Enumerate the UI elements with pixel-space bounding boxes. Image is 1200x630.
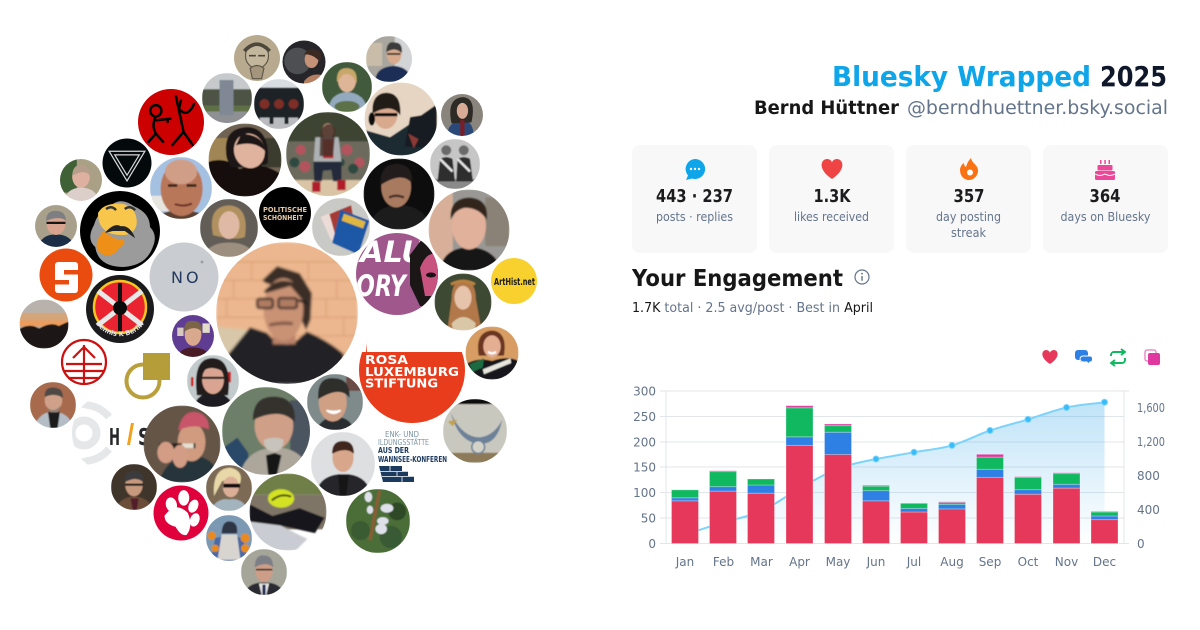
avatar: man in dark jacket on grey bbox=[311, 432, 375, 496]
bar: April bbox=[786, 406, 813, 544]
avatar: man with headphones and dog bbox=[364, 82, 438, 156]
avatar: political beauty logo bbox=[259, 187, 311, 239]
avatar: blond person on green bbox=[322, 62, 372, 112]
avatar: NO ball: NO bbox=[171, 268, 202, 287]
left axis labels: 50 bbox=[641, 512, 656, 526]
avatar: main portrait of Bernd bbox=[216, 242, 358, 384]
right axis labels: 1,200 bbox=[1137, 435, 1165, 449]
legend icon: quotes bbox=[1145, 350, 1160, 365]
legend icon: likes bbox=[1042, 350, 1058, 364]
left axis labels bbox=[633, 384, 656, 551]
avatar: woman blonde bbox=[200, 199, 258, 257]
month labels: May bbox=[826, 555, 850, 569]
avatar: woman with glasses bbox=[187, 355, 239, 407]
title: 2025 bbox=[1100, 60, 1167, 93]
avatar: man in suit bbox=[241, 549, 287, 595]
stat card: likes received bbox=[769, 145, 894, 253]
month labels: Jun bbox=[866, 555, 885, 569]
avatar: purple poster: ORY bbox=[356, 269, 408, 303]
avatar: triangle logo bbox=[102, 138, 152, 188]
avatar: Dennis K Berlin wheel: Dennis K Berlin bbox=[96, 320, 144, 336]
stat card: posts and replies: posts · replies bbox=[656, 210, 733, 224]
right axis labels bbox=[1137, 401, 1165, 551]
avatar: road runner mosaic bbox=[443, 399, 507, 463]
avatar: man in dark bbox=[364, 158, 434, 230]
icon: chat bubble bbox=[686, 159, 705, 180]
stat card: days on Bluesky: 364 bbox=[1090, 186, 1120, 207]
stat card: days on Bluesky bbox=[1043, 145, 1168, 253]
avatar: red lines logo bbox=[62, 340, 106, 384]
icon: cake bbox=[1095, 160, 1115, 180]
avatar: red stick figures bbox=[138, 89, 204, 155]
avatar: sketch portrait bbox=[234, 35, 280, 81]
month labels: Nov bbox=[1055, 555, 1078, 569]
avatar: books on table bbox=[312, 198, 370, 256]
avatar: HIS logo: S bbox=[138, 425, 150, 451]
bar: August bbox=[938, 502, 966, 544]
avatar: red paw logo bbox=[154, 486, 208, 540]
avatar: gold square and ring logo bbox=[126, 353, 170, 398]
plot frame and grid bbox=[660, 391, 1129, 544]
month labels: Jul bbox=[906, 555, 921, 569]
avatar: NO ball bbox=[150, 242, 218, 312]
avatar: purple poster: ALU bbox=[358, 235, 426, 269]
left axis labels: 250 bbox=[633, 410, 656, 424]
avatar: man with navy sweater bbox=[366, 36, 413, 82]
avatar: woman on floral sofa bbox=[286, 112, 370, 197]
avatar: Haus der Wannsee-Konferenz logo: ILDUNGSSTÄTTE bbox=[378, 438, 429, 447]
avatar: Haus der Wannsee-Konferenz logo bbox=[378, 430, 447, 482]
bar: December bbox=[1091, 512, 1118, 544]
avatar: orange S logo bbox=[40, 248, 92, 302]
stat card: posts and replies bbox=[632, 145, 757, 253]
engagement summary: 1.7K total · 2.5 avg/post · Best in April bbox=[632, 300, 873, 316]
icon: flame bbox=[960, 158, 978, 180]
month labels bbox=[675, 555, 1116, 569]
cumulative line bbox=[685, 402, 1104, 535]
avatar: man with dark hair bbox=[111, 464, 157, 510]
avatar: man with camera bbox=[282, 40, 326, 84]
avatar: man with black shirt bbox=[428, 190, 510, 270]
avatar: Haus der Wannsee-Konferenz logo: AUS DER bbox=[378, 446, 409, 455]
month labels: Sep bbox=[979, 555, 1001, 569]
stat card: day posting streak bbox=[906, 145, 1031, 253]
avatar: Rosa Luxemburg Stiftung logo: STIFTUNG bbox=[365, 376, 438, 390]
stat card: likes received: likes received bbox=[794, 210, 869, 224]
avatar: helmet on car bbox=[250, 474, 326, 550]
avatar: woman lying down bbox=[466, 326, 518, 380]
user name: Bernd Hüttner bbox=[754, 97, 900, 119]
avatar: Dennis K Berlin wheel bbox=[86, 275, 154, 343]
bar: November bbox=[1053, 473, 1080, 544]
avatar: man on green background bbox=[60, 159, 102, 201]
avatar: figure with mask among oranges bbox=[206, 515, 252, 561]
stat card: day posting streak: 357 bbox=[954, 186, 984, 207]
legend icon: reposts bbox=[1111, 349, 1125, 366]
avatar: Haus der Wannsee-Konferenz logo: ENK- UND bbox=[385, 430, 419, 439]
month labels: Apr bbox=[789, 555, 810, 569]
month labels: Feb bbox=[713, 555, 734, 569]
icon: info bbox=[855, 270, 869, 284]
avatar: man in purple room bbox=[172, 315, 214, 357]
avatar: HIS logo: H bbox=[109, 425, 120, 451]
avatar: blonde with sunglasses bbox=[206, 465, 252, 511]
left axis labels: 0 bbox=[648, 537, 656, 551]
right axis labels: 800 bbox=[1137, 469, 1160, 483]
right axis labels: 1,600 bbox=[1137, 401, 1165, 415]
bar: October bbox=[1014, 477, 1042, 544]
avatar: man in beige jacket smiling bbox=[222, 387, 312, 475]
bar: June bbox=[862, 485, 890, 544]
legend icon: replies bbox=[1075, 350, 1092, 364]
avatar: black police line bbox=[254, 79, 304, 129]
month labels: Oct bbox=[1018, 555, 1039, 569]
cumulative area bbox=[685, 402, 1104, 544]
bar: May bbox=[824, 424, 852, 544]
user handle: @berndhuettner.bsky.social bbox=[907, 98, 1168, 119]
icon: heart bbox=[822, 159, 842, 179]
avatar: ArtHist.net logo bbox=[491, 258, 537, 304]
month labels: Dec bbox=[1093, 555, 1116, 569]
avatar: sunset bbox=[20, 300, 68, 348]
stat card: days on Bluesky: days on Bluesky bbox=[1060, 210, 1150, 224]
avatar: Rosa Luxemburg Stiftung logo bbox=[359, 343, 470, 425]
avatar: woman in black bbox=[208, 124, 282, 196]
avatar: purple poster bbox=[356, 233, 440, 315]
avatar: ArtHist.net logo: ArtHist.net bbox=[494, 277, 535, 288]
left axis labels: 150 bbox=[633, 460, 656, 474]
avatar: Botticelli painting bbox=[434, 274, 492, 330]
bar: July bbox=[900, 503, 928, 544]
right axis labels: 0 bbox=[1137, 537, 1145, 551]
avatar: man smiling by the river bbox=[307, 374, 363, 430]
avatar: woman with dark hair bbox=[441, 94, 483, 136]
avatar: man with red cap and flute bbox=[144, 406, 220, 482]
month labels: Jan bbox=[675, 555, 694, 569]
avatar: HIS logo bbox=[72, 404, 150, 462]
left axis labels: 300 bbox=[633, 384, 656, 398]
title: Bluesky Wrapped bbox=[832, 60, 1091, 93]
bar: February bbox=[710, 471, 736, 544]
avatar: Rosa Luxemburg Stiftung logo: ROSA bbox=[365, 353, 409, 367]
left axis labels: 200 bbox=[633, 436, 656, 450]
right axis labels: 400 bbox=[1137, 503, 1160, 517]
avatar: political beauty logo: SCHÖNHEIT bbox=[263, 213, 303, 222]
avatar cluster bbox=[20, 35, 537, 595]
stat card: day posting streak: day posting bbox=[936, 210, 1001, 224]
avatar: black and white historic photo bbox=[430, 139, 480, 189]
stat card: likes received: 1.3K bbox=[814, 186, 851, 207]
legend bbox=[1042, 349, 1160, 366]
avatar: flowers bbox=[346, 489, 410, 553]
bar: January bbox=[672, 490, 698, 544]
avatar: Haus der Wannsee-Konferenz logo: WANNSEE-KONFEREN bbox=[378, 455, 447, 464]
cumulative points bbox=[873, 399, 1108, 462]
avatar: bald man bbox=[150, 157, 212, 219]
bar: September bbox=[976, 454, 1004, 544]
heading: Your Engagement: Your Engagement bbox=[631, 266, 843, 292]
avatar: Berlin wall bbox=[202, 73, 252, 124]
avatar: thinking emoji wizard bbox=[80, 191, 160, 271]
stat card: day posting streak: streak bbox=[951, 226, 986, 240]
chart: monthly engagement bbox=[633, 384, 1165, 569]
avatar: Rosa Luxemburg Stiftung logo: LUXEMBURG bbox=[365, 365, 459, 379]
month labels: Aug bbox=[940, 555, 964, 569]
avatar: political beauty logo: POLITISCHE bbox=[263, 206, 307, 214]
stat card: posts and replies: 443 · 237 bbox=[656, 186, 733, 207]
avatar: man with glasses bbox=[35, 205, 77, 247]
bar: March bbox=[748, 479, 774, 544]
avatar: man at brick wall bbox=[30, 382, 76, 428]
month labels: Mar bbox=[750, 555, 773, 569]
left axis labels: 100 bbox=[633, 486, 656, 500]
